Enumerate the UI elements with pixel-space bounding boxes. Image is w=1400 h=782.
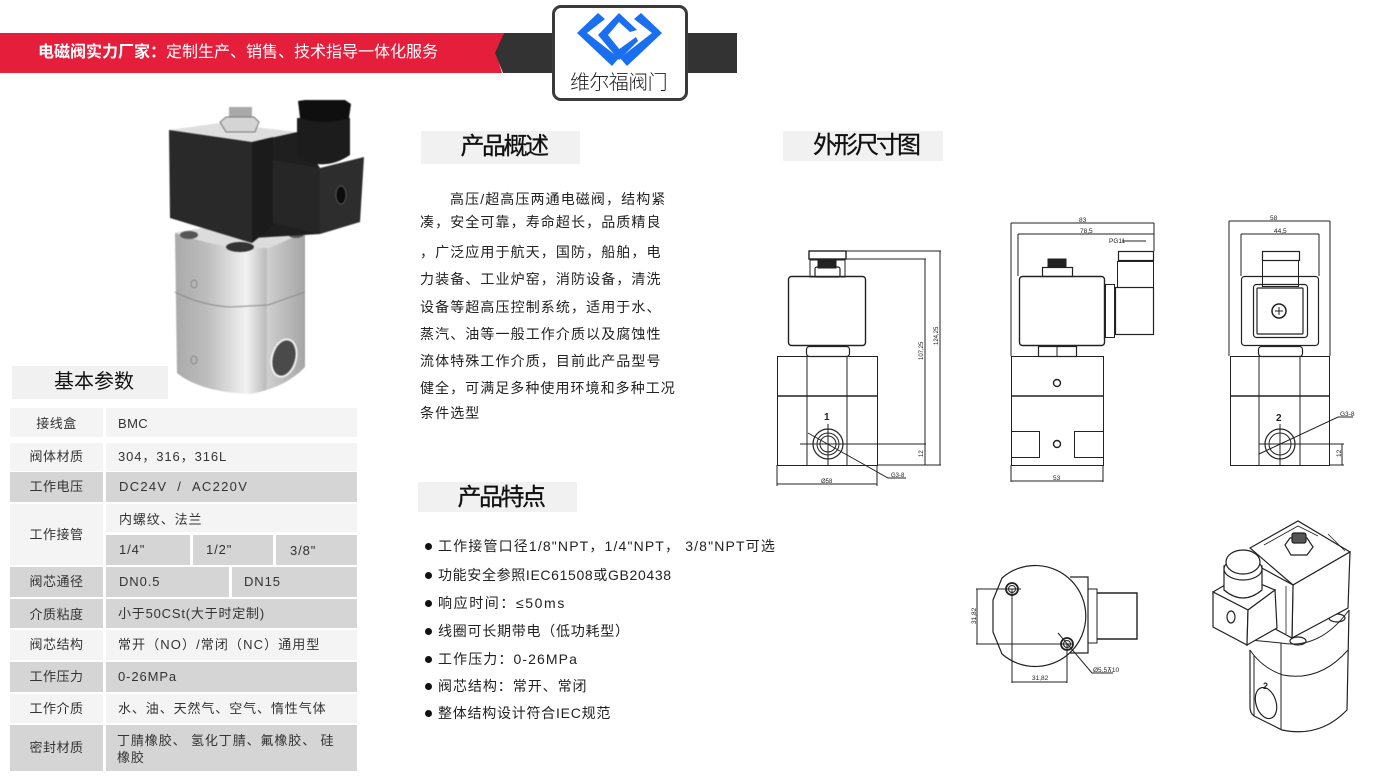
row: structure: [10, 630, 357, 660]
row: media: 水、油、天然气、空气、惰性气体: [118, 701, 327, 716]
row: connection: [10, 504, 357, 565]
parameters heading: 基本参数: [54, 371, 134, 393]
row: media: 工作介质: [29, 701, 84, 716]
drawing: side view: PG11: [1109, 238, 1126, 245]
features list: 功能安全参照IEC61508或GB20438: [438, 567, 672, 583]
overview text: 健全，可满足多种使用环境和多种工况: [420, 380, 676, 396]
dimensions heading: 外形尺寸图: [813, 132, 918, 159]
row: junction box: [10, 408, 357, 437]
drawing: isometric view: [1213, 521, 1350, 732]
features list: 线圈可长期带电（低功耗型）: [438, 623, 630, 639]
drawing: side view: 78,5: [1080, 228, 1093, 235]
dimension drawings: [776, 215, 1355, 732]
drawing: front view: 107,25: [919, 341, 925, 360]
drawing: side view: 83: [1079, 217, 1087, 224]
overview text: 流体特殊工作介质，目前此产品型号: [420, 353, 662, 369]
row: seal: [10, 725, 357, 771]
overview text: 设备等超高压控制系统，适用于水、: [420, 299, 662, 315]
row: viscosity: 介质粘度: [29, 607, 84, 622]
header dark bar: [495, 33, 737, 73]
logo: [552, 5, 688, 101]
parameters heading: [12, 366, 168, 399]
overview text: 凑，安全可靠，寿命超长，品质精良: [420, 214, 662, 230]
drawing: end view: 12: [1336, 449, 1343, 457]
overview text: 条件选型: [420, 405, 480, 421]
dimensions heading: [783, 131, 943, 161]
features list: 阀芯结构：常开、常闭: [438, 678, 588, 694]
row: junction box: BMC: [118, 416, 148, 431]
connector box: [252, 100, 364, 238]
overview text: [420, 191, 676, 421]
features list: 整体结构设计符合IEC规范: [438, 705, 611, 721]
row: connection: 内螺纹、法兰: [119, 512, 202, 527]
drawing: end view: [1229, 215, 1355, 466]
logo name: 维尔福阀门: [570, 72, 667, 94]
row: pressure: 工作压力: [29, 669, 84, 684]
drawing: front view: [777, 251, 941, 486]
header slogan bar: [0, 33, 504, 73]
row: connection: 1/4": [119, 542, 145, 557]
coil: [169, 107, 297, 243]
drawing: end view: 58: [1270, 215, 1278, 222]
row: orifice: DN15: [244, 574, 281, 589]
icon: logo mark: [577, 13, 662, 66]
overview heading: 产品概述: [460, 133, 546, 160]
row: seal: 橡胶: [117, 750, 145, 765]
features list: 响应时间：≤50ms: [438, 595, 566, 611]
features heading: 产品特点: [458, 484, 544, 511]
drawing: front view: G3-8: [891, 473, 905, 479]
drawing: isometric view: 2: [1263, 681, 1268, 691]
drawing: bottom view: Ø5,5⊼10: [1093, 666, 1119, 674]
row: connection: 1/2": [206, 542, 232, 557]
drawing: front view: 124,25: [934, 326, 940, 345]
drawing: front view: 12: [919, 450, 925, 457]
drawing: side view: [1011, 217, 1154, 482]
port: [267, 337, 301, 379]
features list: 工作接管口径1/8"NPT，1/4"NPT， 3/8"NPT可选: [438, 538, 776, 554]
overview text: 蒸汽、油等一般工作介质以及腐蚀性: [420, 326, 662, 342]
row: connection: 3/8": [290, 543, 316, 558]
row: body material: 304，316，316L: [118, 449, 227, 464]
features list: 工作压力：0-26MPa: [438, 651, 578, 667]
overview heading: [421, 131, 580, 164]
features list: [425, 538, 776, 721]
row: body material: 阀体材质: [29, 449, 84, 464]
valve metal body: [175, 228, 305, 394]
row: viscosity: 小于50CSt(大于时定制): [118, 606, 265, 621]
row: seal: 密封材质: [29, 740, 84, 755]
overview text: 力装备、工业炉窑，消防设备，清洗: [420, 271, 662, 287]
drawing: side view: 53: [1053, 475, 1061, 482]
row: voltage: DC24V / AC220V: [119, 479, 248, 494]
product photo: solenoid valve: [168, 99, 365, 394]
row: voltage: [10, 472, 357, 502]
header banner: [0, 5, 737, 101]
drawing: bottom view: 31,82: [1032, 675, 1049, 682]
drawing: end view: 44,5: [1274, 228, 1287, 235]
drawing: bottom view: 31,82: [971, 607, 978, 624]
row: media: [10, 694, 357, 723]
row: viscosity: [10, 599, 357, 628]
drawing: bottom view: [971, 566, 1137, 683]
row: voltage: 工作电压: [29, 479, 84, 494]
row: seal: 丁腈橡胶、 氢化丁腈、氟橡胶、 硅: [117, 733, 335, 748]
overview text: 高压/超高压两通电磁阀，结构紧: [450, 191, 666, 207]
row: body material: [10, 443, 357, 471]
row: orifice: 阀芯通径: [29, 574, 84, 589]
parameters table: [10, 408, 357, 771]
row: pressure: [10, 662, 357, 692]
overview text: ，广泛应用于航天，国防，船舶，电: [420, 244, 662, 260]
drawing: end view: 2: [1276, 413, 1282, 424]
header slogan bar: 电磁阀实力厂家：定制生产、销售、技术指导一体化服务: [38, 44, 438, 61]
row: junction box: 接线盒: [36, 416, 77, 431]
drawing: front view: 1: [824, 412, 830, 423]
drawing: front view: Ø58: [821, 479, 833, 485]
row: orifice: [10, 567, 357, 597]
row: pressure: 0-26MPa: [118, 669, 177, 684]
row: orifice: DN0.5: [119, 574, 160, 589]
drawing: end view: G3-8: [1340, 411, 1355, 418]
row: structure: 阀芯结构: [29, 637, 84, 652]
features heading: [418, 482, 577, 512]
row: structure: 常开（NO）/常闭（NC）通用型: [118, 637, 320, 652]
row: connection: 工作接管: [29, 527, 84, 542]
